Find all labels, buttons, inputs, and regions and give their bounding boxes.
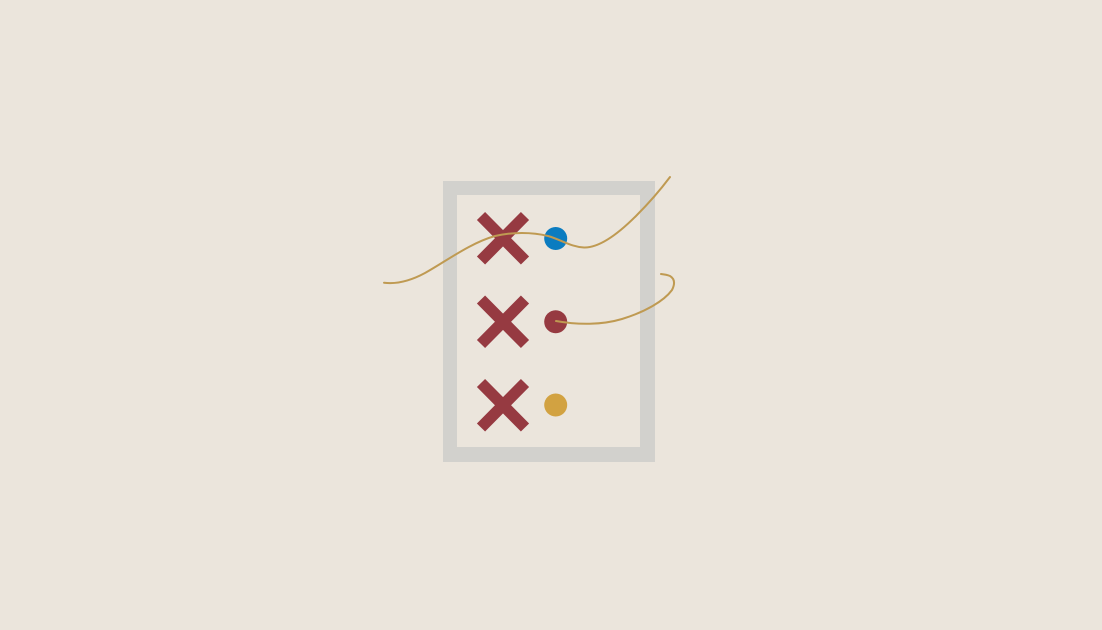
row 3: yellow dot — [544, 394, 567, 416]
row 1: blue dot — [544, 227, 567, 250]
row 1: red cross — [481, 216, 525, 260]
curved line: from row 2 dot — [556, 274, 674, 324]
wavy line: crosses row 1 — [384, 177, 670, 283]
checklist frame — [443, 181, 655, 462]
row 2: red dot — [544, 310, 567, 333]
row 2: red cross — [481, 300, 525, 344]
row 3: red cross — [481, 383, 525, 428]
